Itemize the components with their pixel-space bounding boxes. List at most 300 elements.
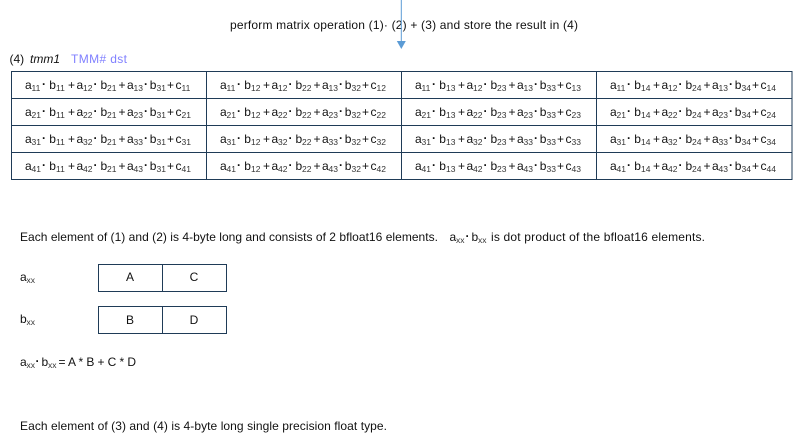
diagram: b_xx element layout (98, 306, 226, 334)
cell r4c1: a (25, 159, 32, 173)
label: a_xx: a (20, 270, 27, 284)
cell r4c2: 42 (278, 164, 288, 174)
cell r3c1: · (42, 131, 46, 145)
cell r4c1: b (150, 159, 157, 173)
cell r2c1: 21 (32, 110, 41, 120)
cell r2c3: b (439, 105, 446, 119)
cell r2c2: · (237, 104, 241, 118)
cell r1c3: 13 (446, 83, 456, 93)
cell r2c2: + (362, 105, 369, 119)
cell r3c4 (610, 131, 776, 147)
cell r4c2: b (244, 159, 251, 173)
cell r1c3: a (466, 78, 474, 92)
cell r4c3: · (484, 158, 488, 172)
cell r4c1: 42 (83, 164, 93, 174)
cell r1c1: a (25, 78, 32, 92)
cell r4c2: + (362, 159, 369, 173)
cell r1c4: 14 (766, 83, 776, 93)
cell r2c3: b (540, 105, 547, 119)
cell r3c4: b (735, 132, 742, 146)
cell r3c1: b (100, 132, 108, 146)
cell r3c3: b (490, 132, 498, 146)
cell r2c3: · (484, 104, 488, 118)
cell r1c1: 12 (83, 83, 93, 93)
cell r3c2: · (237, 131, 241, 145)
cell r3c4: 32 (668, 137, 678, 147)
cell r2c2: 23 (328, 110, 338, 120)
cell r4c1: · (144, 158, 148, 172)
cell r4c1: c (176, 159, 182, 173)
text: element description for (1) and (2): a (450, 230, 456, 244)
cell r1c2: a (272, 78, 278, 92)
cell r3c3: 33 (572, 137, 581, 147)
cell r4c2: b (345, 159, 352, 173)
cell r3c4: b (686, 132, 692, 146)
cell r3c1: 33 (134, 137, 143, 147)
cell r1c3: c (566, 78, 572, 92)
cell r3c3: a (415, 132, 422, 146)
cell r2c3: · (432, 104, 436, 118)
cell r1c4: · (729, 77, 733, 91)
cell r4c1: + (167, 159, 174, 173)
cell r1c1: b (150, 78, 157, 92)
formula: dot product: xx (48, 360, 57, 370)
cell r3c1: b (150, 132, 157, 146)
cell r2c3: 22 (473, 110, 483, 120)
cell r4c2: 41 (226, 164, 236, 174)
cell r2c4: · (627, 104, 631, 118)
cell r1c3: · (484, 77, 488, 91)
cell r1c3: 33 (546, 83, 556, 93)
cell r4c3: b (490, 159, 498, 173)
cell r3c3 (415, 131, 581, 147)
cell r2c1: + (68, 105, 75, 119)
cell r2c2: a (272, 105, 278, 119)
cell r4c4: b (735, 159, 742, 173)
cell r3c2: a (322, 132, 329, 146)
cell r4c4: 44 (766, 164, 776, 174)
cell r3c2: a (220, 132, 227, 146)
cell r2c2: + (314, 105, 321, 119)
cell r1c4: + (653, 78, 660, 92)
cell r2c4: 34 (742, 110, 751, 120)
cell r4c3: c (566, 159, 572, 173)
cell r1c1: + (167, 78, 174, 92)
cell r2c1: 22 (83, 110, 93, 120)
diagram: a_xx element layout: C (190, 270, 199, 284)
cell r4c4: 43 (718, 164, 728, 174)
cell r2c2: 22 (376, 110, 386, 120)
diagram: b_xx element layout: D (190, 313, 199, 327)
diagram: a_xx element layout (98, 264, 226, 292)
cell r4c2: a (272, 159, 278, 173)
cell r1c2: a (322, 78, 329, 92)
cell r1c2 (220, 77, 386, 93)
cell r4c4 (610, 158, 776, 174)
cell r1c2: a (220, 78, 227, 92)
cell r4c4: a (662, 159, 668, 173)
cell r2c1: a (76, 105, 84, 119)
cell r3c3: a (517, 132, 524, 146)
cell r3c1: b (49, 132, 56, 146)
cell r3c3: 31 (422, 137, 431, 147)
cell r1c2: 12 (251, 83, 261, 93)
cell r3c4: b (634, 132, 641, 146)
cell r2c1: · (94, 104, 98, 118)
cell r2c4: + (653, 105, 660, 119)
cell r3c4: + (752, 132, 759, 146)
cell r1c1: 13 (134, 83, 143, 93)
cell r2c1: b (49, 105, 56, 119)
formula: dot product: b (42, 355, 48, 369)
cell r1c3: 12 (473, 83, 483, 93)
cell r2c3 (415, 104, 581, 120)
cell r4c1: 11 (56, 164, 65, 174)
cell r2c1 (25, 104, 191, 120)
cell r3c3: 32 (473, 137, 483, 147)
cell r3c1: 21 (107, 137, 117, 147)
cell r3c1: a (127, 132, 134, 146)
cell r2c1: + (118, 105, 126, 119)
cell r2c2: 22 (278, 110, 288, 120)
cell r4c4: + (653, 159, 660, 173)
cell r4c3: b (540, 159, 547, 173)
cell r2c4: b (735, 105, 742, 119)
cell r1c4: a (662, 78, 668, 92)
cell r4c2: c (370, 159, 376, 173)
cell r4c2: + (314, 159, 321, 173)
cell r2c2: b (296, 105, 302, 119)
cell r4c3: · (432, 158, 436, 172)
cell r4c1: a (76, 159, 84, 173)
formula: dot product: = A * B + C * D (58, 355, 136, 369)
diagram: b_xx element layout: B (126, 313, 134, 327)
cell r1c1: a (76, 78, 84, 92)
cell r3c3: 33 (546, 137, 556, 147)
cell r1c1: · (94, 77, 98, 91)
cell r1c4: a (712, 78, 719, 92)
cell r2c2: + (263, 105, 270, 119)
cell r1c1: · (144, 77, 148, 91)
cell r4c1: · (94, 158, 98, 172)
cell r1c4: 13 (718, 83, 728, 93)
cell r2c3: + (458, 105, 465, 119)
cell r3c3: a (466, 132, 474, 146)
cell r2c4: a (662, 105, 668, 119)
cell r4c4: 41 (616, 164, 626, 174)
cell r3c4: a (712, 132, 719, 146)
cell r1c1: b (100, 78, 108, 92)
cell r1c3: · (432, 77, 436, 91)
cell r4c1: · (42, 158, 46, 172)
cell r1c2: + (314, 78, 321, 92)
cell r2c1: 21 (182, 110, 191, 120)
cell r4c2: 42 (376, 164, 386, 174)
cell r4c3: 33 (546, 164, 556, 174)
cell r2c1: 21 (107, 110, 117, 120)
formula: dot product: · (36, 354, 40, 368)
cell r1c4: 34 (742, 83, 751, 93)
cell r4c1: 43 (134, 164, 143, 174)
cell r1c3: 13 (524, 83, 533, 93)
cell r1c3: + (557, 78, 564, 92)
cell r4c3: 23 (497, 164, 507, 174)
cell r3c1: 31 (182, 137, 191, 147)
cell r1c3: a (517, 78, 524, 92)
cell r4c1: + (68, 159, 75, 173)
cell r3c1: + (118, 132, 126, 146)
arrow: down into result matrix (397, 0, 406, 49)
cell r2c2 (220, 104, 386, 120)
cell r4c1 (25, 158, 191, 174)
cell r1c3: + (458, 78, 465, 92)
cell r1c3: 11 (422, 83, 431, 93)
cell r1c2: b (244, 78, 251, 92)
cell r4c2: 43 (328, 164, 338, 174)
cell r3c4: 14 (641, 137, 651, 147)
cell r2c3: 23 (524, 110, 533, 120)
label: b_xx: xx (26, 317, 36, 327)
cell r3c1: 11 (56, 137, 65, 147)
cell r1c1: b (49, 78, 56, 92)
cell r3c4: 34 (766, 137, 776, 147)
cell r4c4: 24 (692, 164, 702, 174)
cell r1c1: + (118, 78, 126, 92)
text: element description for (1) and (2): Each element of (1) and (2) is 4-byte long and consists of 2 bfloat16 elements. (20, 230, 438, 244)
cell r3c2: · (288, 131, 292, 145)
cell r2c3: a (517, 105, 524, 119)
cell r1c2: + (263, 78, 270, 92)
cell r4c4: · (678, 158, 682, 172)
cell r3c2: 32 (352, 137, 361, 147)
cell r4c4: b (634, 159, 641, 173)
cell r3c2: c (370, 132, 376, 146)
cell r2c4: b (686, 105, 692, 119)
cell r4c4: · (627, 158, 631, 172)
cell r3c3: b (540, 132, 547, 146)
cell r3c4: 24 (692, 137, 702, 147)
cell r4c3: 13 (446, 164, 456, 174)
cell r4c4: + (752, 159, 759, 173)
cell r3c2: b (345, 132, 352, 146)
cell r3c4: · (627, 131, 631, 145)
cell r1c2: · (288, 77, 292, 91)
cell r2c1: 11 (56, 110, 65, 120)
cell r1c4 (610, 77, 776, 93)
cell r4c1: + (118, 159, 126, 173)
cell r4c2: b (296, 159, 302, 173)
cell r3c3: + (458, 132, 465, 146)
cell r3c3: 23 (497, 137, 507, 147)
cell r4c2: 22 (302, 164, 312, 174)
cell r3c4: a (662, 132, 668, 146)
cell r4c3: a (466, 159, 474, 173)
cell r1c2: 13 (328, 83, 338, 93)
cell r2c4: 23 (718, 110, 728, 120)
diagram: a_xx element layout: A (126, 270, 134, 284)
cell r3c2: + (263, 132, 270, 146)
cell r1c3: b (439, 78, 446, 92)
cell r4c4: 42 (668, 164, 678, 174)
cell r2c4: b (634, 105, 641, 119)
cell r3c3: · (484, 131, 488, 145)
cell r2c2: a (322, 105, 329, 119)
cell r2c3: 13 (446, 110, 456, 120)
cell r3c3: 33 (524, 137, 533, 147)
cell r3c1: + (68, 132, 75, 146)
cell r3c3: · (534, 131, 538, 145)
cell r2c3: b (490, 105, 498, 119)
cell r1c4: · (678, 77, 682, 91)
cell r3c1: + (167, 132, 174, 146)
cell r1c4: c (760, 78, 766, 92)
cell r2c4: + (752, 105, 759, 119)
cell r4c3: · (534, 158, 538, 172)
cell r1c3: 13 (572, 83, 581, 93)
cell r3c3: 13 (446, 137, 456, 147)
cell r3c2: + (362, 132, 369, 146)
cell r2c1: · (42, 104, 46, 118)
cell r2c1: · (144, 104, 148, 118)
cell r3c4: 34 (742, 137, 751, 147)
cell r3c1: · (94, 131, 98, 145)
cell r3c3: c (566, 132, 572, 146)
cell r4c3: + (508, 159, 516, 173)
cell r3c2: + (314, 132, 321, 146)
cell r4c2 (220, 158, 386, 174)
cell r2c3: a (415, 105, 422, 119)
cell r2c1: a (127, 105, 134, 119)
cell r2c2: b (345, 105, 352, 119)
cell r1c4: 11 (616, 83, 626, 93)
cell r3c2: · (339, 131, 343, 145)
cell r2c3: + (557, 105, 564, 119)
cell r2c1: 23 (134, 110, 143, 120)
cell r2c4: 21 (616, 110, 626, 120)
cell r3c1: c (176, 132, 182, 146)
cell r2c1: a (25, 105, 32, 119)
cell r1c1: + (68, 78, 75, 92)
cell r4c3: a (415, 159, 422, 173)
cell r2c4: 24 (766, 110, 776, 120)
text: element description for (1) and (2): xx (456, 235, 465, 245)
cell r3c3: b (439, 132, 446, 146)
cell r3c1: · (144, 131, 148, 145)
cell r3c1: 31 (32, 137, 41, 147)
text: element description for (1) and (2): xx (478, 235, 487, 245)
cell r1c1: 11 (182, 83, 191, 93)
cell r4c3: 43 (572, 164, 581, 174)
cell r1c4: b (686, 78, 692, 92)
cell r2c4 (610, 104, 776, 120)
cell r2c2: c (370, 105, 376, 119)
cell r4c2: a (322, 159, 329, 173)
cell r1c2: b (345, 78, 352, 92)
cell r1c4: 24 (692, 83, 702, 93)
cell r2c2: · (288, 104, 292, 118)
cell r3c2: 12 (251, 137, 261, 147)
cell r4c4: c (760, 159, 766, 173)
cell r2c3: 21 (422, 110, 431, 120)
cell r4c3: a (517, 159, 524, 173)
cell r3c2 (220, 131, 386, 147)
cell r4c2: a (220, 159, 227, 173)
cell r3c4: + (704, 132, 711, 146)
cell r4c2: · (237, 158, 241, 172)
cell r1c2: 12 (376, 83, 386, 93)
cell r4c4: · (729, 158, 733, 172)
cell r2c3: · (534, 104, 538, 118)
cell r3c2: a (272, 132, 278, 146)
cell r1c2: + (362, 78, 369, 92)
cell r2c4: 22 (668, 110, 678, 120)
cell r4c4: a (610, 159, 617, 173)
cell r1c4: 12 (668, 83, 678, 93)
cell r3c4: · (729, 131, 733, 145)
cell r4c1: b (49, 159, 56, 173)
cell r1c1 (25, 77, 191, 93)
cell r2c1: b (100, 105, 108, 119)
formula: dot product: xx (26, 360, 36, 370)
cell r2c4: + (704, 105, 711, 119)
cell r1c2: c (370, 78, 376, 92)
label: b_xx: b (20, 312, 27, 326)
cell r1c1: a (127, 78, 134, 92)
cell r2c1: 31 (156, 110, 166, 120)
cell r2c2: b (244, 105, 251, 119)
cell r1c1: c (176, 78, 182, 92)
text: element description for (1) and (2) (20, 229, 705, 245)
cell r3c2: b (244, 132, 251, 146)
cell r3c2: 31 (226, 137, 236, 147)
cell r1c3 (415, 77, 581, 93)
cell r3c1 (25, 131, 191, 147)
cell r2c2: · (339, 104, 343, 118)
cell r1c4: b (634, 78, 641, 92)
cell r2c1: c (176, 105, 182, 119)
cell r4c1: 41 (32, 164, 41, 174)
cell r1c3: b (490, 78, 498, 92)
cell r4c3 (415, 158, 581, 174)
cell r3c2: b (296, 132, 302, 146)
cell r3c4: c (760, 132, 766, 146)
cell r1c2: 12 (278, 83, 288, 93)
cell r3c4: a (610, 132, 617, 146)
cell r3c1: 32 (83, 137, 93, 147)
cell r1c3: · (534, 77, 538, 91)
cell r1c3: a (415, 78, 422, 92)
heading: matrix operation: perform matrix operation (1)· (2) + (3) and store the result in (4) (230, 18, 578, 32)
cell r2c2: a (220, 105, 227, 119)
cell r4c2: · (339, 158, 343, 172)
cell r1c2: b (296, 78, 302, 92)
cell r4c2: · (288, 158, 292, 172)
cell r1c1: 11 (32, 83, 41, 93)
cell r3c1: a (76, 132, 84, 146)
label: result register: TMM# dst (71, 52, 128, 66)
cell r2c4: a (610, 105, 617, 119)
cell r4c3: 42 (473, 164, 483, 174)
cell r1c4: a (610, 78, 617, 92)
cell r1c1: 31 (156, 83, 166, 93)
cell r3c4: 31 (616, 137, 626, 147)
cell r1c3: + (508, 78, 516, 92)
cell r4c3: + (458, 159, 465, 173)
cell r4c3: 41 (422, 164, 431, 174)
cell r1c2: 22 (302, 83, 312, 93)
cell r2c4: 14 (641, 110, 651, 120)
cell r3c3: + (508, 132, 516, 146)
